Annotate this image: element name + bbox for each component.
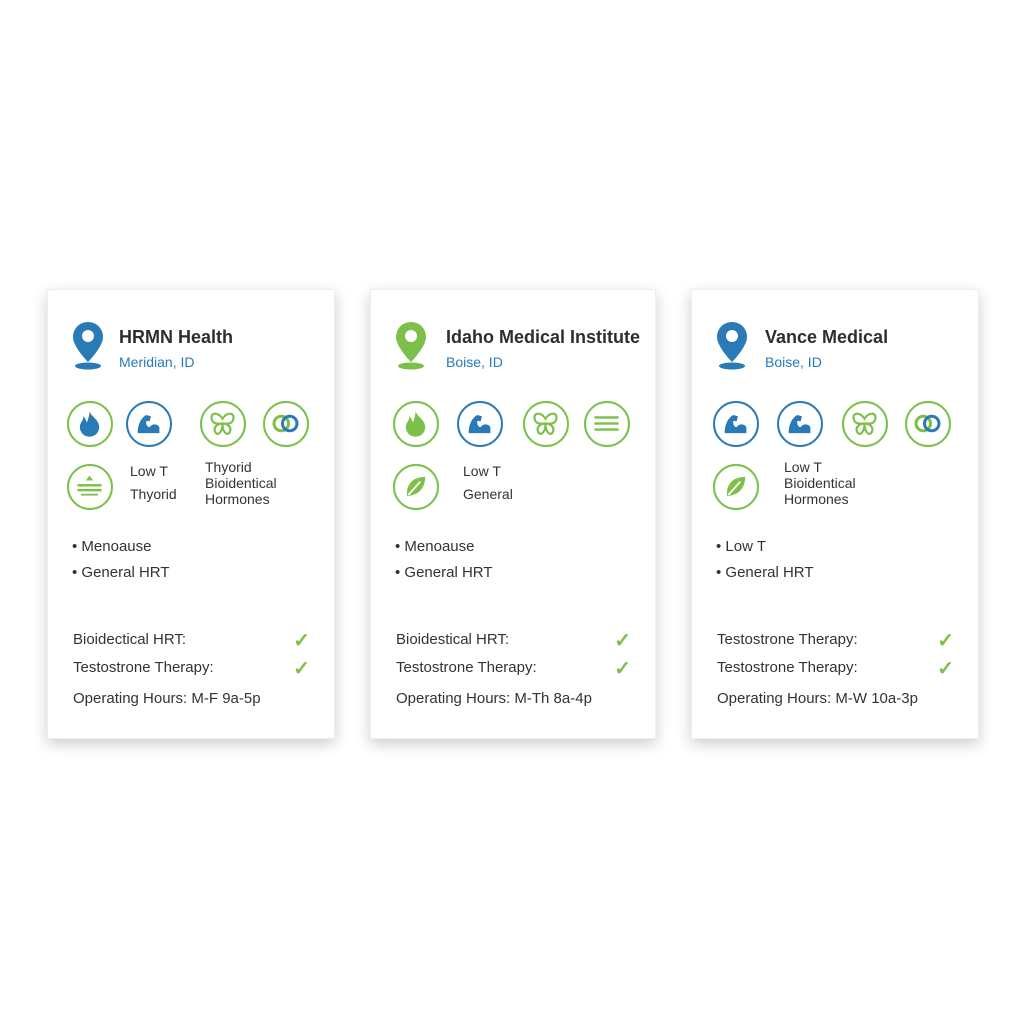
service rows: Testostrone Therapy: (717, 659, 858, 676)
heading: Idaho Medical Institute (446, 327, 640, 347)
bullets: • General HRT (395, 564, 493, 581)
text: Low T Thyorid: Low T (130, 463, 168, 479)
text: Low T Bioidentical Hormones: Low T (784, 459, 822, 475)
service rows: ✓ (614, 658, 631, 680)
icons (393, 401, 630, 510)
text: Low T General (463, 463, 513, 502)
service rows: Testostrone Therapy: (717, 631, 858, 648)
service rows: Bioidestical HRT: (396, 631, 509, 648)
bullets (72, 538, 170, 581)
text: Low T Thyorid (130, 463, 177, 502)
service rows: ✓ (937, 658, 954, 680)
bullets: • General HRT (72, 564, 170, 581)
service rows: ✓ (614, 630, 631, 652)
text: Low T Bioidentical Hormones: Bioidentical (784, 475, 856, 491)
card: HRMN Health (47, 289, 335, 739)
card: Vance Medical (691, 289, 979, 739)
icons (67, 401, 309, 510)
icon: location pin (73, 322, 103, 370)
bullets (395, 538, 493, 581)
service rows: ✓ (293, 630, 310, 652)
bullets: • Low T (716, 538, 766, 555)
service rows: Testostrone Therapy: (396, 659, 537, 676)
icon: location pin (396, 322, 426, 370)
text: Low T Bioidentical Hormones: Hormones (784, 491, 849, 507)
heading: HRMN Health (119, 327, 233, 347)
bullets (716, 538, 814, 581)
card: Idaho Medical Institute (370, 289, 656, 739)
text: Low T Bioidentical Hormones (784, 459, 856, 507)
location: Meridian, ID (119, 354, 194, 370)
text: Low T General: Low T (463, 463, 501, 479)
service rows: ✓ (293, 658, 310, 680)
text: Thyorid Bioidentical Hormones: Bioidentical (205, 475, 277, 491)
service rows: Testostrone Therapy: (73, 659, 214, 676)
service rows (396, 630, 631, 707)
heading: Vance Medical (765, 327, 888, 347)
location: Boise, ID (446, 354, 503, 370)
text: Low T Thyorid: Thyorid (130, 486, 177, 502)
text: Low T General: General (463, 486, 513, 502)
service rows: Operating Hours: M-W 10a-3p (717, 690, 918, 707)
service rows (73, 630, 310, 707)
icons (713, 401, 951, 510)
service rows: ✓ (937, 630, 954, 652)
service rows: Operating Hours: M-F 9a-5p (73, 690, 261, 707)
service rows: Operating Hours: M-Th 8a-4p (396, 690, 592, 707)
service rows: Bioidectical HRT: (73, 631, 186, 648)
service rows (717, 630, 954, 707)
text: Thyorid Bioidentical Hormones: Thyorid (205, 459, 252, 475)
icon: location pin (717, 322, 747, 370)
text: Thyorid Bioidentical Hormones (205, 459, 277, 507)
location: Boise, ID (765, 354, 822, 370)
bullets: • Menoause (395, 538, 474, 555)
bullets: • General HRT (716, 564, 814, 581)
bullets: • Menoause (72, 538, 151, 555)
text: Thyorid Bioidentical Hormones: Hormones (205, 491, 270, 507)
